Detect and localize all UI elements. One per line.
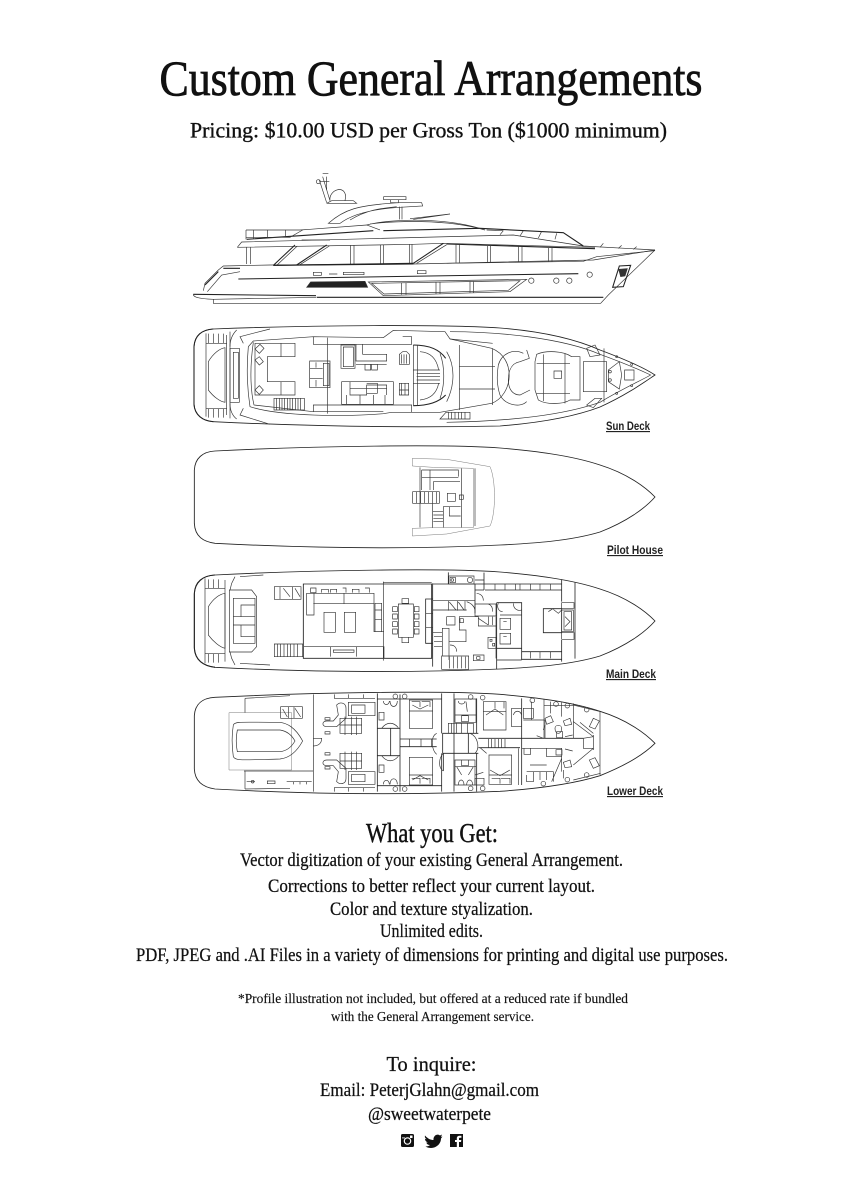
footnote: with the General Arrangement service. [331, 1009, 534, 1024]
title: Custom General Arrangements [160, 50, 702, 106]
pilot house hull outline [194, 446, 655, 548]
cabin stateroom equipment [323, 703, 346, 727]
what you get list: Corrections to better reflect your current layout. [268, 876, 595, 897]
contact details: @sweetwaterpete [368, 1104, 491, 1125]
social icons [401, 1134, 463, 1148]
main deck plan [194, 570, 655, 671]
yacht profile illustration [193, 173, 655, 303]
what you get list: Vector digitization of your existing General Arrangement. [240, 850, 623, 871]
main deck hull outline [194, 570, 655, 671]
sun deck plan [194, 326, 655, 427]
sun deck label: Sun Deck [606, 421, 650, 433]
contact details: To inquire: [386, 1052, 476, 1076]
icon: facebook [450, 1134, 463, 1147]
superstructure [237, 235, 655, 250]
what you get list [136, 850, 728, 966]
footnote [238, 991, 628, 1024]
contact details [320, 1052, 539, 1125]
contact details: Email: PeterjGlahn@gmail.com [320, 1080, 539, 1101]
pilot house label: Pilot House [607, 545, 663, 557]
tender [229, 713, 292, 770]
sun deck hull outline [194, 326, 655, 427]
lower deck label: Lower Deck [607, 786, 664, 798]
main deck label: Main Deck [606, 669, 657, 681]
pricing subtitle: Pricing: $10.00 USD per Gross Ton ($1000 minimum) [190, 118, 667, 142]
lower deck hull outline [194, 692, 655, 794]
icon: twitter [425, 1134, 442, 1148]
cabins and corridors [377, 693, 583, 792]
what you get list: Unlimited edits. [380, 921, 483, 942]
footnote: *Profile illustration not included, but offered at a reduced rate if bundled [238, 991, 628, 1006]
what you get list: PDF, JPEG and .AI Files in a variety of dimensions for printing and digital use purposes. [136, 945, 728, 966]
icon: instagram [401, 1134, 414, 1147]
pilot house plan [194, 446, 655, 548]
upper deck & arch [383, 228, 583, 246]
what you get list: Color and texture styalization. [330, 899, 533, 920]
lower deck plan [194, 692, 655, 794]
what you get heading: What you Get: [366, 818, 498, 848]
